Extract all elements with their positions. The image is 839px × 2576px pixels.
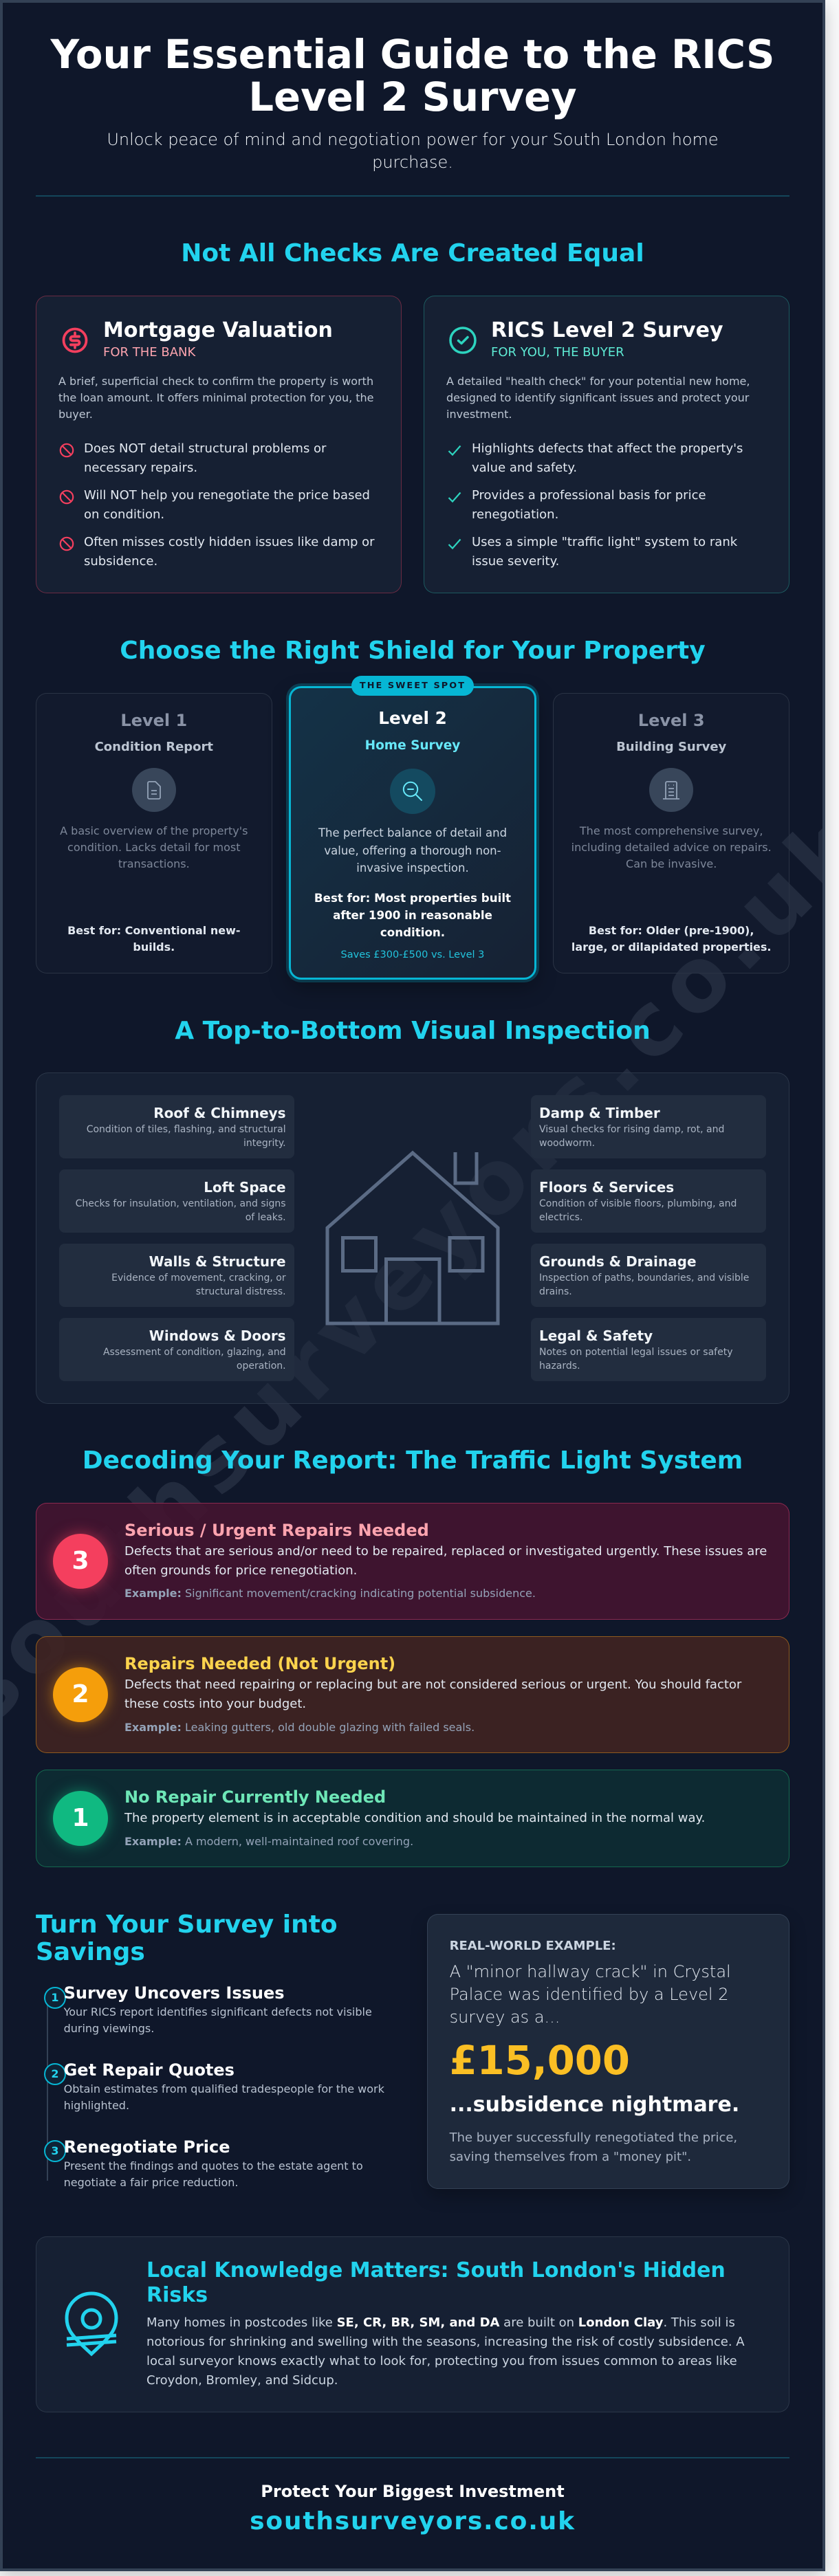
description: often grounds for price renegotiation.: [124, 1563, 357, 1578]
step 2: [44, 2060, 384, 2112]
title: [50, 32, 775, 120]
list item: value and safety.: [472, 461, 577, 475]
best for: [314, 891, 511, 939]
list item: issue severity.: [472, 554, 559, 569]
step text: [63, 2005, 372, 2035]
icon: ban: [59, 536, 74, 551]
body text: local surveyor knows exactly what to look for, protecting you from issues common to areas like: [146, 2354, 737, 2368]
icon: check circle: [449, 327, 477, 354]
badge: the sweet spot: THE SWEET SPOT: [360, 681, 466, 691]
step text: Your RICS report identifies significant defects not visible: [64, 2005, 372, 2018]
item: windows: Windows & Doors: [149, 1328, 286, 1344]
list item: Will NOT help you renegotiate the price based: [84, 488, 370, 503]
list item: Does NOT detail structural problems or: [84, 441, 326, 456]
description: investment.: [446, 407, 512, 421]
title: No Repair Currently Needed: [124, 1787, 386, 1807]
item: walls: Evidence of movement, cracking, or: [111, 1273, 286, 1284]
best for: [571, 924, 772, 954]
title: Your Essential Guide to the RICS: [50, 32, 775, 78]
description: these costs into your budget.: [124, 1697, 306, 1711]
heading: traffic light: Decoding Your Report: The Traffic Light System: [83, 1446, 743, 1475]
body text: [146, 2313, 745, 2390]
step number: 3: [51, 2144, 59, 2157]
list item: [472, 441, 743, 475]
description: [446, 374, 750, 421]
title: Risks: [146, 2283, 208, 2307]
heading: turn survey into savings: Turn Your Survey into: [36, 1911, 338, 1939]
description: A brief, superficial check to confirm the property is worth: [58, 374, 373, 388]
item: windows: [59, 1318, 294, 1381]
item: floors: Condition of visible floors, plumbing, and: [539, 1198, 737, 1209]
icon: magnifier: [390, 769, 435, 814]
item: legal: Legal & Safety: [539, 1328, 653, 1344]
description: Can be invasive.: [626, 857, 717, 870]
list item: subsidence.: [84, 554, 157, 569]
item: damp: Visual checks for rising damp, rot, and: [539, 1124, 724, 1135]
heading: visual inspection: A Top-to-Bottom Visual Inspection: [175, 1017, 651, 1045]
card title: Mortgage Valuation: [103, 318, 333, 342]
item: grounds: Grounds & Drainage: [539, 1253, 697, 1270]
item: grounds: drains.: [539, 1286, 572, 1297]
subtitle: [107, 129, 719, 172]
quote: A "minor hallway crack" in Crystal: [450, 1962, 731, 1981]
body text: Many homes in postcodes like SE, CR, BR, SM, and DA are built on London Clay. This soil is: [146, 2315, 735, 2330]
icon: document: [132, 768, 176, 812]
step text: during viewings.: [64, 2022, 154, 2035]
card subtitle: FOR THE BANK: [103, 345, 195, 360]
description: The property element is in acceptable condition and should be maintained in the normal way.: [124, 1811, 705, 1825]
list item: [84, 488, 370, 522]
item: floors: Floors & Services: [539, 1179, 674, 1196]
step text: Present the findings and quotes to the estate agent to: [64, 2159, 363, 2172]
list item: [472, 488, 706, 522]
heading: not all checks: Not All Checks Are Created Equal: [181, 239, 644, 267]
description: The perfect balance of detail and: [318, 826, 507, 839]
panel: rics level 2 survey: [424, 296, 789, 593]
step text: highlighted.: [64, 2099, 129, 2112]
call to action: Protect Your Biggest Investment: [261, 2482, 565, 2501]
badge: 2: [53, 1666, 108, 1721]
item: loft: Checks for insulation, ventilation, and signs: [76, 1198, 286, 1209]
item: loft: [59, 1169, 294, 1233]
panel: condition 2: [36, 1636, 789, 1753]
step text: Obtain estimates from qualified tradespeople for the work: [64, 2082, 384, 2095]
description: the loan amount. It offers minimal protection for you, the: [58, 390, 374, 404]
description: [58, 374, 374, 421]
note: saving themselves from a "money pit".: [450, 2150, 691, 2164]
step number: 1: [51, 1991, 59, 2004]
step text: [64, 2159, 363, 2189]
panel: inspection diagram: [36, 1072, 789, 1404]
panel: level 1: [36, 693, 272, 973]
item: walls: structural distress.: [196, 1286, 286, 1297]
best for: large, or dilapidated properties.: [571, 940, 772, 954]
best for: Best for: Older (pre-1900),: [589, 924, 754, 937]
icon: building: [649, 768, 693, 812]
best for: builds.: [133, 940, 175, 954]
note: The buyer successfully renegotiated the price,: [450, 2131, 737, 2145]
list item: renegotiation.: [472, 507, 558, 522]
badge: 1: [53, 1791, 108, 1846]
badge: the sweet spot: [351, 676, 474, 696]
icon: dollar: [62, 327, 88, 353]
icon: check: [448, 445, 461, 456]
description: condition. Lacks detail for most: [67, 841, 241, 854]
badge: 3: [53, 1533, 108, 1588]
list item: [84, 535, 375, 569]
icon: ban: [59, 489, 74, 505]
list item: [472, 535, 737, 569]
best for: Best for: Most properties built: [314, 891, 511, 905]
panel: condition 1: [36, 1770, 789, 1867]
step number: [44, 2140, 66, 2162]
heading: turn survey into savings: [36, 1911, 338, 1966]
title: Local Knowledge Matters: South London's Hidden: [146, 2258, 726, 2282]
item: walls: Walls & Structure: [149, 1253, 286, 1270]
level name: Building Survey: [616, 740, 726, 754]
best for: condition.: [380, 925, 445, 939]
description: buyer.: [58, 407, 93, 421]
item: legal: [531, 1318, 766, 1381]
figure: amount: £15,000: [450, 2038, 630, 2084]
list item: Highlights defects that affect the property's: [472, 441, 743, 456]
label: REAL-WORLD EXAMPLE:: [450, 1939, 616, 1952]
panel: local knowledge: [36, 2236, 789, 2412]
list item: Often misses costly hidden issues like damp or: [84, 535, 375, 549]
icon: check: [448, 492, 461, 503]
icon: check: [448, 539, 461, 550]
item: damp: Damp & Timber: [539, 1105, 660, 1121]
description: [571, 824, 772, 870]
list item: on condition.: [84, 507, 164, 522]
item: damp: [531, 1095, 766, 1158]
item: grounds: Inspection of paths, boundaries, and visible: [539, 1273, 749, 1284]
icon: location pin: [63, 2291, 121, 2357]
description: Defects that are serious and/or need to be repaired, replaced or investigated urgently. These issues are: [124, 1544, 767, 1559]
best for: after 1900 in reasonable: [333, 907, 492, 921]
panel: real-world example: [427, 1914, 789, 2189]
step number: [44, 2063, 66, 2085]
description: invasive inspection.: [356, 861, 469, 874]
description: A basic overview of the property's: [60, 824, 248, 837]
note: [450, 2128, 737, 2167]
quote: Palace was identified by a Level 2: [450, 1984, 728, 2003]
level name: Condition Report: [95, 740, 213, 754]
description: [60, 824, 248, 870]
list item: necessary repairs.: [84, 461, 197, 475]
panel: level 3: [553, 693, 789, 973]
title: Level 2 Survey: [248, 74, 577, 120]
description: [124, 1677, 741, 1711]
description: transactions.: [118, 857, 190, 870]
example: Example: A modern, well-maintained roof covering.: [124, 1834, 413, 1848]
description: value, offering a thorough non-: [324, 844, 501, 857]
step 1: [44, 1983, 372, 2035]
savings note: Saves £300-£500 vs. Level 3: [341, 949, 484, 960]
card subtitle: FOR YOU, THE BUYER: [491, 345, 624, 360]
item: windows: operation.: [237, 1361, 286, 1372]
item: roof: [59, 1095, 294, 1158]
item: roof: integrity.: [243, 1138, 286, 1149]
subtitle: Unlock peace of mind and negotiation power for your South London home: [107, 129, 719, 148]
description: designed to identify significant issues and protect your: [446, 390, 749, 404]
step title: Renegotiate Price: [64, 2137, 230, 2157]
item: windows: Assessment of condition, glazing, and: [103, 1347, 286, 1358]
panel: condition 3: [36, 1503, 789, 1620]
level title: Level 1: [120, 711, 187, 730]
description: [318, 826, 507, 874]
level title: Level 3: [638, 711, 705, 730]
icon: ban: [59, 443, 74, 458]
step number: 2: [51, 2067, 59, 2080]
description: Defects that need repairing or replacing but are not considered serious or urgent. You should factor: [124, 1677, 741, 1692]
step text: [64, 2082, 384, 2112]
level name: Home Survey: [365, 738, 460, 753]
title: Repairs Needed (Not Urgent): [124, 1654, 395, 1673]
step title: Get Repair Quotes: [64, 2060, 235, 2080]
footer: [36, 2479, 789, 2540]
badge: 1: 1: [72, 1804, 89, 1832]
description: including detailed advice on repairs.: [571, 841, 772, 854]
heading: choose shield: Choose the Right Shield for Your Property: [120, 637, 706, 665]
list item: [84, 441, 326, 475]
quote: [450, 1962, 731, 2027]
example: Example: Significant movement/cracking indicating potential subsidence.: [124, 1587, 536, 1600]
icon: house: [326, 1151, 499, 1325]
body text: notorious for shrinking and swelling with the seasons, increasing the risk of costly subsidence. A: [146, 2335, 745, 2349]
heading: turn survey into savings: Savings: [36, 1938, 145, 1966]
badge: 3: 3: [72, 1547, 89, 1574]
item: loft: Loft Space: [204, 1179, 286, 1196]
item: floors: electrics.: [539, 1212, 582, 1223]
step 3: [44, 2137, 363, 2189]
item: damp: woodworm.: [539, 1138, 595, 1149]
item: legal: Notes on potential legal issues or safety: [539, 1347, 732, 1358]
panel: level 2: [289, 686, 536, 980]
best for: [67, 924, 241, 954]
step text: negotiate a fair price reduction.: [64, 2176, 238, 2189]
title: [146, 2258, 726, 2308]
item: roof: Condition of tiles, flashing, and structural: [87, 1124, 286, 1135]
panel: mortgage valuation: [36, 296, 402, 593]
outcome: ...subsidence nightmare.: [450, 2093, 739, 2117]
step number: [44, 1987, 66, 2009]
description: [124, 1544, 767, 1578]
step title: Survey Uncovers Issues: [64, 1983, 285, 2003]
item: floors: [531, 1169, 766, 1233]
timeline line: [47, 1997, 48, 2181]
item: grounds: [531, 1244, 766, 1307]
website: southsurveyors.co.uk: [250, 2507, 576, 2535]
quote: survey as a...: [450, 2007, 560, 2027]
card title: RICS Level 2 Survey: [491, 318, 723, 342]
item: roof: Roof & Chimneys: [153, 1105, 286, 1121]
item: legal: hazards.: [539, 1361, 580, 1372]
example: Example: Leaking gutters, old double glazing with failed seals.: [124, 1721, 475, 1734]
description: A detailed "health check" for your potential new home,: [446, 374, 750, 388]
title: Serious / Urgent Repairs Needed: [124, 1521, 429, 1540]
item: walls: [59, 1244, 294, 1307]
description: The most comprehensive survey,: [580, 824, 763, 837]
item: loft: of leaks.: [246, 1212, 286, 1223]
body text: Croydon, Bromley, and Sidcup.: [146, 2373, 338, 2388]
badge: 2: 2: [72, 1680, 89, 1708]
header: [50, 32, 775, 172]
list item: Uses a simple "traffic light" system to rank: [472, 535, 737, 549]
best for: Best for: Conventional new-: [67, 924, 241, 937]
list item: Provides a professional basis for price: [472, 488, 706, 503]
subtitle: purchase.: [372, 153, 453, 172]
level title: Level 2: [378, 708, 447, 728]
